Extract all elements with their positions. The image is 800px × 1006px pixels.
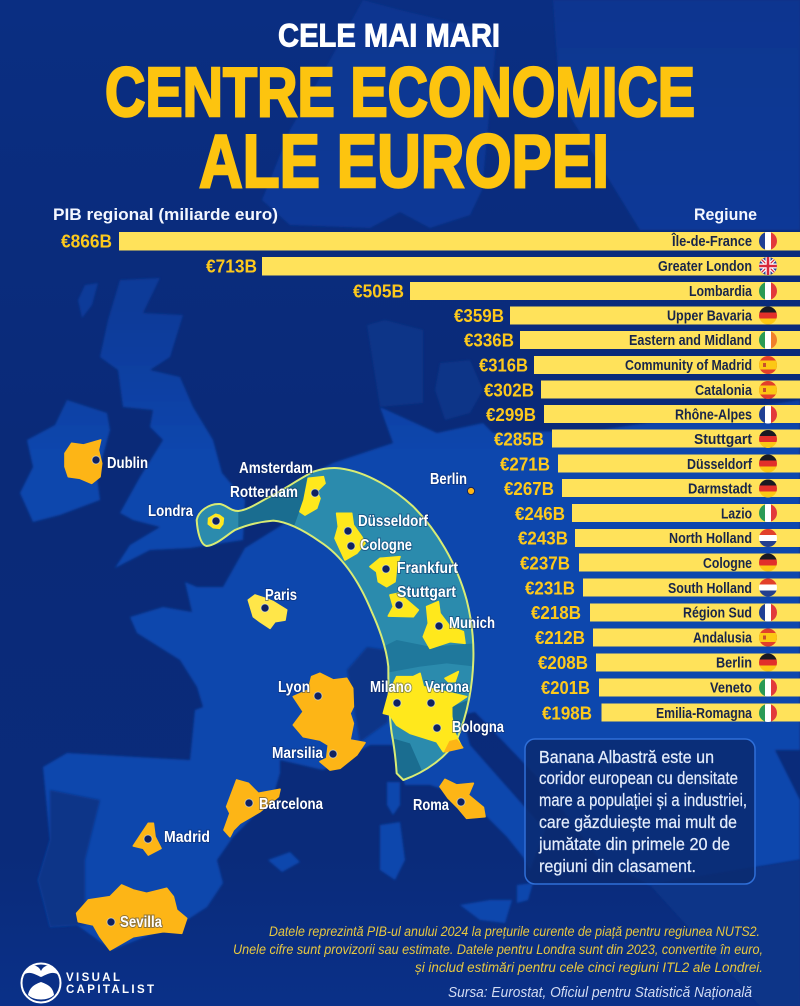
bar chart: €212B	[535, 628, 585, 648]
city labels: Madrid	[164, 829, 210, 846]
bar chart: €243B	[518, 528, 568, 548]
footnote: Unele cifre sunt provizorii sau estimate. Datele pentru Londra sunt din 2023, convertite în euro,	[233, 942, 763, 957]
bar chart: Stuttgart	[694, 432, 752, 448]
city labels: Paris	[265, 587, 297, 604]
city labels	[107, 455, 504, 931]
source: Sursa: Eurostat, Oficiul pentru Statistică Națională	[448, 985, 752, 1001]
bar chart: €299B	[486, 405, 536, 425]
bar chart: North Holland	[669, 531, 752, 547]
logo: Visual Capitalist: CAPITALIST	[66, 984, 154, 996]
footnote: și includ estimări pentru cele cinci regiuni ITL2 ale Londrei.	[415, 960, 763, 975]
bar chart: Lombardia	[689, 284, 753, 300]
title: CELE MAI MARI	[278, 18, 500, 54]
callout: Blue Banana explanation: coridor european cu densitate	[539, 768, 738, 788]
callout: Blue Banana explanation: care găzduiește mai mult de	[539, 812, 737, 832]
title	[105, 18, 695, 203]
callout: Blue Banana explanation: mare a populației și a industriei,	[539, 790, 747, 810]
map: orange region Ireland	[65, 440, 102, 483]
bar chart: Andalusia	[693, 630, 753, 646]
bar chart: €218B	[531, 603, 581, 623]
footnote: Datele reprezintă PIB-ul anului 2024 la prețurile curente de piață pentru regiunea NUTS2.	[269, 924, 760, 939]
bar chart: Île-de-France	[671, 232, 752, 250]
axis heading: regional GDP: PIB regional (miliarde euro)	[53, 205, 278, 224]
bar chart: Catalonia	[695, 383, 753, 399]
city labels: Londra	[148, 503, 193, 520]
logo: Visual Capitalist: VISUAL	[66, 972, 120, 984]
bar chart: €505B	[353, 282, 404, 302]
city labels: Munich	[449, 615, 495, 632]
bar chart: €208B	[538, 653, 588, 673]
callout: Blue Banana explanation: regiuni din clasament.	[539, 856, 696, 876]
bar chart: Eastern and Midland	[629, 333, 752, 349]
bar chart: Lazio	[721, 506, 752, 522]
city labels: Lyon	[278, 679, 310, 696]
logo: Visual Capitalist	[22, 964, 154, 1002]
bar chart: Berlin	[716, 656, 752, 672]
footnote	[233, 924, 763, 975]
bar chart: €302B	[484, 380, 534, 400]
bar chart: €866B	[61, 232, 112, 252]
city labels: Düsseldorf	[358, 513, 429, 530]
map: Blue Banana corridor	[197, 468, 477, 783]
city labels: Marsilia	[272, 745, 323, 762]
bar chart: €316B	[479, 356, 528, 376]
map: orange regions France	[293, 673, 365, 770]
city dots	[92, 456, 475, 926]
bar chart: Düsseldorf	[687, 457, 752, 473]
bar chart: South Holland	[668, 581, 752, 597]
title: ALE EUROPEI	[199, 119, 609, 203]
city labels: Rotterdam	[230, 484, 298, 501]
callout: Blue Banana explanation: Banana Albastră este un	[539, 747, 714, 767]
city labels: Roma	[413, 797, 449, 814]
bar chart: Darmstadt	[688, 482, 752, 498]
bar chart: €237B	[520, 554, 570, 574]
bar chart: Veneto	[710, 680, 752, 696]
map: orange region Lazio	[440, 779, 485, 818]
bar chart: Rhône-Alpes	[675, 408, 752, 424]
map: highlighted regions in banana	[208, 477, 467, 752]
bar chart	[61, 232, 800, 724]
city labels: Dublin	[107, 455, 148, 472]
city labels: Cologne	[360, 537, 412, 554]
city labels: Frankfurt	[397, 560, 459, 577]
city labels: Sevilla	[120, 914, 162, 931]
city labels: Bologna	[452, 719, 504, 736]
bar chart: Emilia-Romagna	[656, 706, 753, 722]
bar chart: €336B	[464, 330, 514, 350]
city labels: Milano	[370, 679, 412, 696]
map: orange regions Spain	[77, 780, 280, 950]
city labels: Berlin	[430, 471, 467, 488]
callout: Blue Banana explanation	[525, 739, 755, 884]
callout: Blue Banana explanation: jumătate din primele 20 de	[538, 834, 730, 854]
bar chart: €267B	[504, 479, 554, 499]
axis heading: region: Regiune	[694, 205, 757, 224]
bar chart: €198B	[542, 704, 592, 724]
city labels: Stuttgart	[397, 584, 457, 601]
bar chart: Région Sud	[683, 606, 752, 622]
map: darker shaded land	[38, 320, 800, 1006]
city labels: Barcelona	[259, 796, 323, 813]
bar chart: €285B	[494, 430, 544, 450]
bar chart: Cologne	[703, 556, 752, 572]
city labels: Verona	[425, 679, 469, 696]
bar chart: Community of Madrid	[625, 358, 752, 374]
bar chart: €201B	[541, 678, 590, 698]
bar chart: €231B	[525, 578, 575, 598]
bar chart: Greater London	[658, 259, 752, 275]
bar chart: €359B	[454, 306, 504, 326]
bar chart: €713B	[206, 256, 257, 276]
bar chart: €271B	[500, 454, 550, 474]
bar chart: Upper Bavaria	[667, 308, 753, 324]
bar chart: €246B	[515, 504, 565, 524]
city labels: Amsterdam	[239, 460, 313, 477]
